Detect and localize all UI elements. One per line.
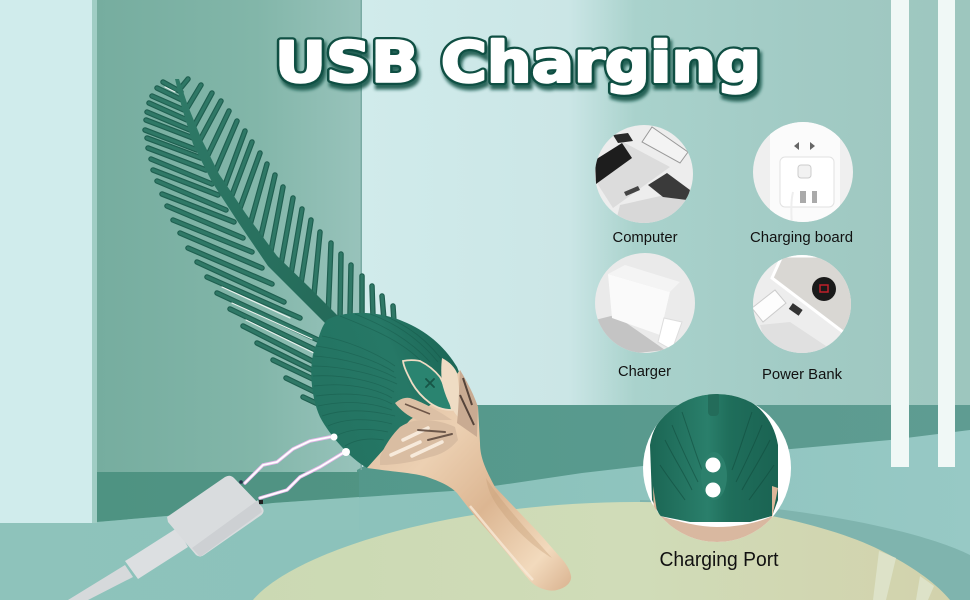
feather barbs	[145, 79, 394, 404]
feather device	[145, 79, 571, 591]
icon: charger	[595, 253, 695, 355]
label: charging port: Charging Port	[660, 549, 779, 571]
label: charging board: Charging board	[750, 229, 853, 246]
cable wire	[68, 565, 133, 600]
gold handle	[367, 370, 571, 591]
title: USB Charging	[277, 35, 763, 100]
label: power bank: Power Bank	[762, 366, 842, 383]
icon: charging board	[753, 122, 853, 225]
feather stem	[175, 79, 338, 324]
device body	[311, 313, 473, 468]
icon: power bank	[753, 255, 851, 353]
gold lotus petals	[380, 358, 478, 465]
connector	[167, 476, 264, 556]
icon: computer	[595, 125, 693, 225]
title: USB Charging	[275, 30, 761, 96]
handle shading	[470, 478, 552, 580]
strain relief	[125, 528, 188, 579]
lightning arcs	[245, 434, 350, 498]
title: USB Charging	[275, 30, 761, 96]
label: charger: Charger	[618, 363, 671, 380]
label: computer: Computer	[612, 229, 678, 246]
charging port inset	[643, 392, 791, 545]
usb cable	[68, 476, 264, 600]
